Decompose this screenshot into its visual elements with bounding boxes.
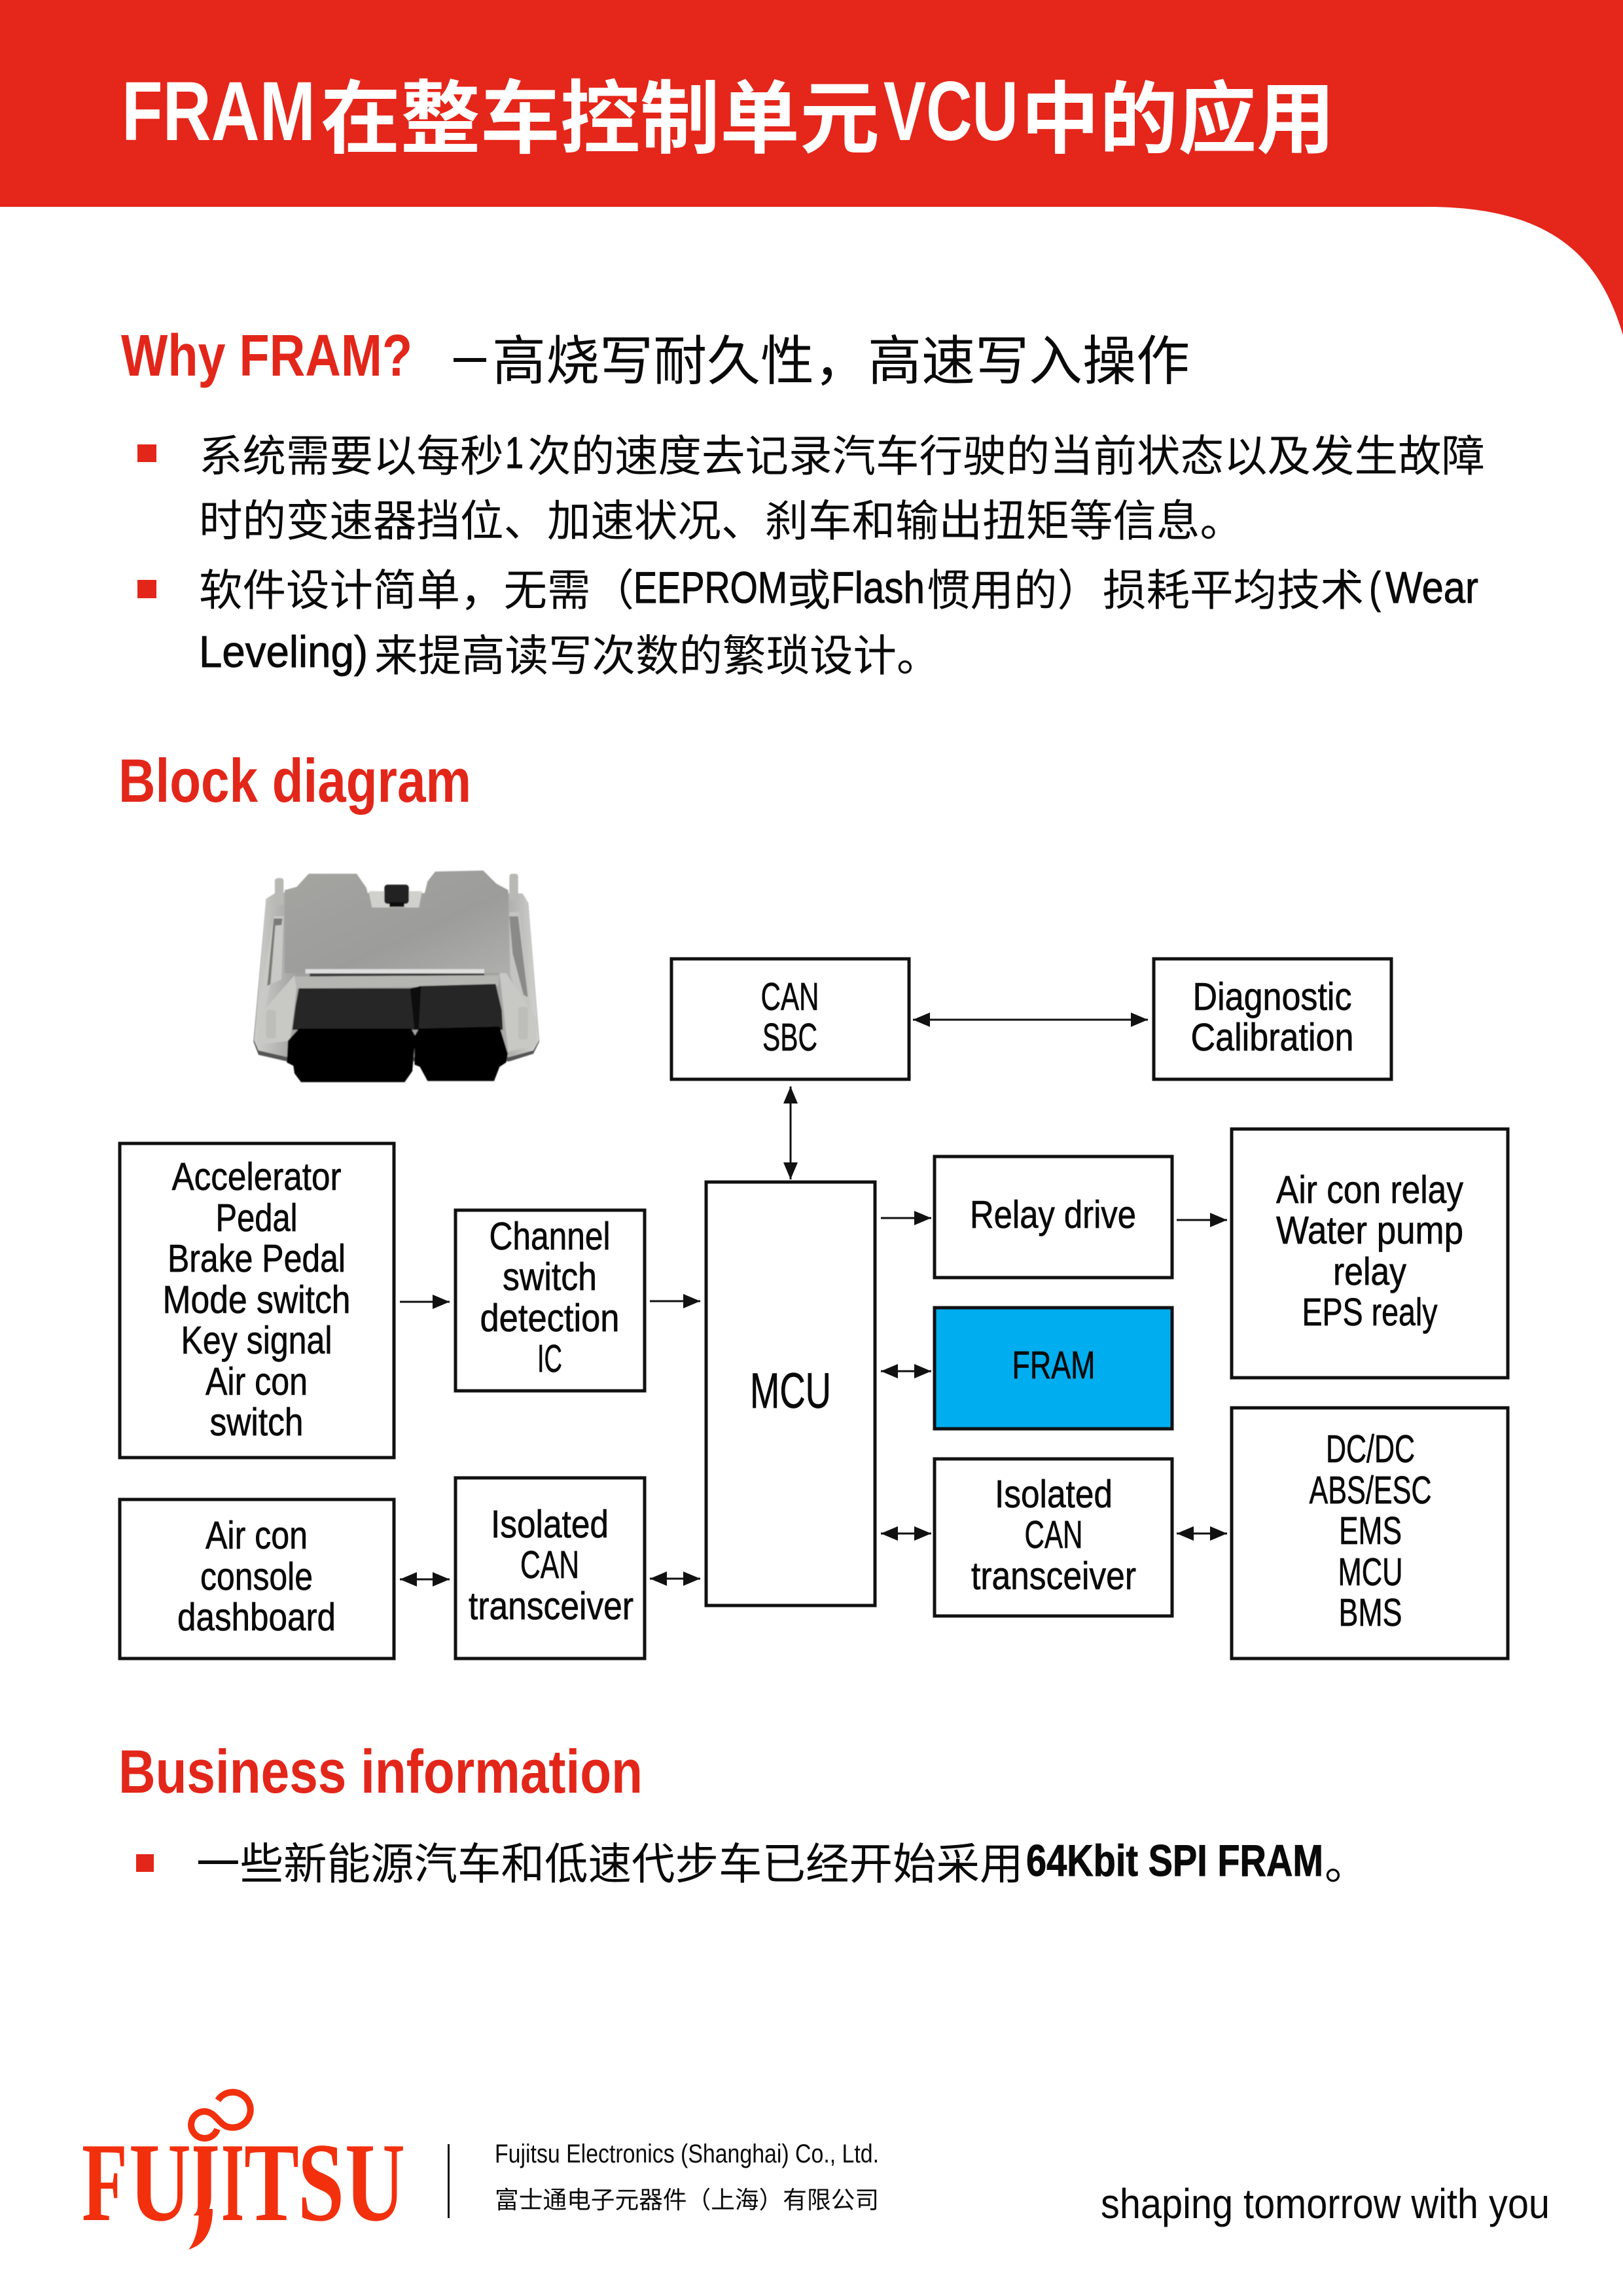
- arrow: Channel switch to MCU: [650, 1300, 700, 1302]
- box: inputs: Brake Pedal: [168, 1237, 346, 1280]
- box: Isolated CAN transceiver left: Isolated: [491, 1503, 609, 1546]
- bullet 1 text: 次的速度去记录汽车行驶的当前状态以及发生故障: [527, 433, 1485, 481]
- arrow: MCU to Isolated CAN right: [881, 1533, 931, 1534]
- infinity symbol: [191, 2092, 251, 2138]
- box: Channel switch detection IC: IC: [537, 1337, 562, 1380]
- bullet 2 text: 惯用的）: [927, 567, 1101, 615]
- heading: Business information: Business information: [118, 1737, 643, 1806]
- box: inputs: [120, 1143, 394, 1458]
- arrow: CAN SBC to MCU: [789, 1086, 792, 1179]
- arrow: MCU to Relay drive: [881, 1217, 931, 1219]
- bullet 2 text: Flash: [831, 563, 925, 613]
- box: relays: Air con relay: [1276, 1168, 1463, 1211]
- heading: Block diagram: Block diagram: [118, 746, 471, 815]
- box: inputs: Accelerator: [171, 1155, 342, 1198]
- box: CAN SBC: [671, 959, 909, 1079]
- box: inputs: Pedal: [216, 1196, 297, 1240]
- bullet text: [196, 1836, 1368, 1889]
- company name: [495, 2140, 879, 2214]
- box: FRAM: [935, 1308, 1172, 1429]
- box: CAN SBC: SBC: [762, 1016, 817, 1059]
- box: Diagnostic Calibration: Calibration: [1191, 1016, 1353, 1059]
- box: Air con console dashboard: Air con: [205, 1514, 308, 1557]
- arrow: dashboard to Isolated CAN left: [400, 1579, 450, 1580]
- wordmark: T: [244, 2121, 299, 2245]
- arrow: CAN SBC to Diagnostic: [913, 1018, 1148, 1021]
- box: vehicle controllers: ABS/ESC: [1309, 1469, 1432, 1512]
- bullet 2 text: 软件设计简单，无需（: [199, 567, 634, 615]
- box: vehicle controllers: [1232, 1408, 1508, 1659]
- arrow: MCU to FRAM: [881, 1371, 931, 1372]
- bullet 2 text: Wear: [1385, 563, 1478, 613]
- box: Channel switch detection IC: Channel: [490, 1215, 610, 1258]
- box: inputs: Key signal: [181, 1319, 332, 1362]
- box: Air con console dashboard: [120, 1499, 394, 1659]
- box: Air con console dashboard: dashboard: [177, 1596, 336, 1639]
- box: inputs: switch: [209, 1401, 304, 1444]
- bullet: [136, 1854, 154, 1872]
- arrow: inputs to Channel switch: [400, 1301, 450, 1302]
- box: relays: EPS realy: [1302, 1291, 1438, 1334]
- box: Relay drive: [935, 1157, 1172, 1278]
- footer divider: [448, 2144, 450, 2218]
- box: Air con console dashboard: console: [200, 1555, 313, 1598]
- bullet 2: [137, 580, 156, 598]
- box: Isolated CAN transceiver left: CAN: [520, 1543, 579, 1587]
- title: 中的应用: [1021, 76, 1335, 164]
- wordmark: J: [177, 2121, 220, 2245]
- box: CAN SBC: CAN: [760, 975, 819, 1018]
- bullet text: 64Kbit SPI FRAM: [1026, 1836, 1323, 1886]
- bullet 2 text: 或: [787, 567, 831, 615]
- block diagram: [120, 959, 1508, 1659]
- title: 在整车控制单元: [321, 75, 880, 164]
- bullet text: 。: [1325, 1840, 1368, 1889]
- box: Isolated CAN transceiver right: Isolated: [995, 1473, 1113, 1516]
- box: Channel switch detection IC: switch: [503, 1255, 597, 1299]
- box: Isolated CAN transceiver right: transceiver: [971, 1554, 1136, 1598]
- arrow: Relay drive to relays: [1177, 1219, 1227, 1221]
- heading: Why FRAM: Why FRAM?: [121, 323, 412, 389]
- box: inputs: Air con: [205, 1360, 308, 1403]
- box: relays: relay: [1333, 1250, 1406, 1293]
- business bullet: [136, 1836, 1368, 1889]
- bullet 2 text: EEPROM: [633, 563, 787, 613]
- box: vehicle controllers: MCU: [1338, 1551, 1403, 1594]
- bullet 2 text: 损耗平均技术: [1103, 567, 1364, 615]
- box: Isolated CAN transceiver right: [935, 1459, 1172, 1616]
- box: Isolated CAN transceiver left: [455, 1478, 645, 1659]
- box: MCU: [706, 1182, 875, 1605]
- heading: Why FRAM: [121, 323, 1190, 391]
- box: Channel switch detection IC: [455, 1210, 645, 1391]
- box: relays: Water pump: [1276, 1209, 1463, 1252]
- box: MCU: MCU: [750, 1363, 831, 1419]
- box: vehicle controllers: BMS: [1339, 1591, 1402, 1634]
- box: Relay drive: Relay drive: [970, 1193, 1136, 1236]
- bullet 1 text: 时的变速器挡位、加速状况、刹车和输出扭矩等信息。: [199, 497, 1243, 546]
- Fujitsu logo: [82, 2092, 405, 2250]
- bullet 1 text: 系统需要以每秒: [199, 433, 504, 481]
- wordmark: S: [298, 2121, 344, 2245]
- tagline: shaping tomorrow with you: [1101, 2180, 1550, 2227]
- bullet 2 text: [199, 563, 1478, 681]
- title: FRAM: [122, 65, 315, 158]
- wordmark: I: [221, 2121, 244, 2245]
- title: VCU: [883, 65, 1018, 158]
- bullet list: why FRAM: [137, 428, 1485, 681]
- heading: Why FRAM: 高烧写耐久性，高速写入操作: [492, 332, 1190, 391]
- bullet 1 text: [199, 428, 1485, 546]
- wordmark: U: [129, 2121, 191, 2245]
- bullet 1 text: 1: [505, 428, 524, 478]
- box: Channel switch detection IC: detection: [480, 1297, 619, 1340]
- box: Isolated CAN transceiver left: transceiver: [469, 1585, 633, 1628]
- box: vehicle controllers: DC/DC: [1326, 1427, 1415, 1471]
- bullet 1: [137, 444, 156, 462]
- box: Isolated CAN transceiver right: CAN: [1025, 1513, 1082, 1556]
- arrow: Isolated CAN to controllers: [1177, 1533, 1227, 1534]
- bullet 2 text: (: [1369, 563, 1381, 613]
- box: Diagnostic Calibration: Diagnostic: [1192, 975, 1352, 1018]
- wordmark: U: [345, 2121, 405, 2245]
- header banner: [0, 0, 1623, 335]
- box: relays: [1232, 1129, 1508, 1378]
- wordmark: F: [82, 2121, 128, 2245]
- bullet text: 一些新能源汽车和低速代步车已经开始采用: [196, 1840, 1024, 1889]
- bullet 2 text: 来提高读写次数的繁琐设计。: [374, 632, 940, 681]
- box: Diagnostic Calibration: [1154, 959, 1391, 1079]
- box: FRAM: FRAM: [1012, 1344, 1096, 1387]
- company name: Fujitsu Electronics (Shanghai) Co., Ltd.: [495, 2140, 879, 2168]
- box: vehicle controllers: EMS: [1339, 1509, 1402, 1552]
- title: [122, 65, 1335, 164]
- bullet 2 text: Leveling): [199, 627, 368, 677]
- wordmark: [82, 2145, 403, 2250]
- ECU photo: [253, 870, 539, 1082]
- company name: 富士通电子元器件（上海）有限公司: [495, 2187, 879, 2214]
- box: inputs: Mode switch: [162, 1278, 351, 1321]
- arrow: Isolated CAN left to MCU: [650, 1577, 700, 1580]
